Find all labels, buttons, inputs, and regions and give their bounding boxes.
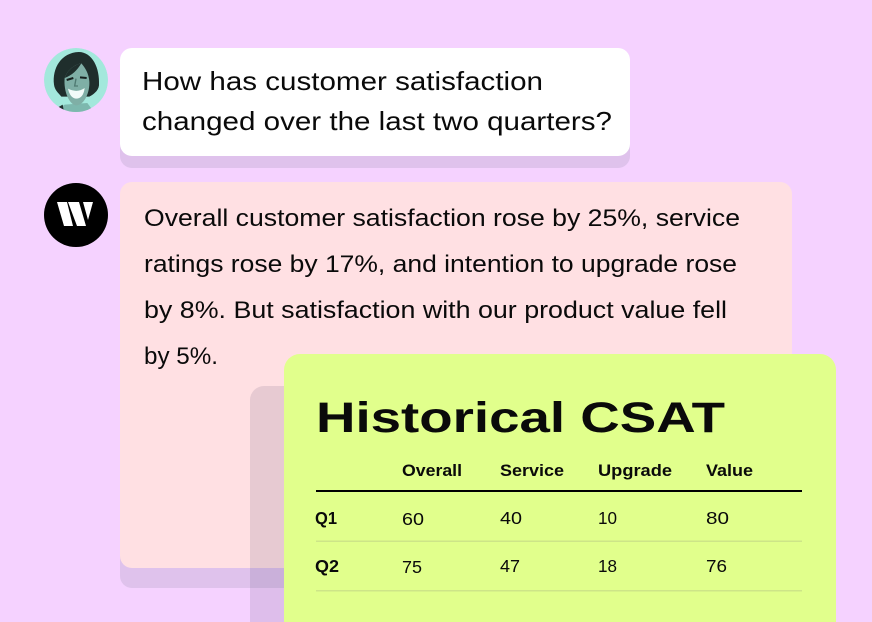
assistant logo [44, 183, 108, 247]
question text: changed over the last two quarters? [142, 106, 612, 136]
row Q2: Q2 [315, 556, 339, 576]
table header: Overall [402, 461, 462, 480]
row Q2: 47 [500, 556, 520, 576]
row Q1: Q1 [315, 508, 337, 528]
row Q1 [315, 508, 729, 529]
card title: Historical CSAT [316, 394, 725, 442]
question bubble [120, 48, 630, 168]
row Q2: 75 [402, 557, 422, 577]
row Q2 [315, 556, 727, 577]
table header [402, 461, 753, 480]
question text [142, 66, 612, 136]
answer text: by 5%. [144, 343, 218, 370]
row Q1: 10 [598, 508, 617, 528]
answer text: by 8%. But satisfaction with our product value fell [144, 297, 727, 324]
row Q1: 80 [706, 508, 729, 528]
row Q2: 18 [598, 556, 617, 576]
answer text: ratings rose by 17%, and intention to upgrade rose [144, 251, 737, 278]
row Q1: 40 [500, 508, 522, 528]
answer bubble [120, 182, 792, 588]
answer text [144, 205, 740, 370]
row Q2: 76 [706, 556, 727, 576]
table header: Service [500, 461, 564, 480]
answer text: Overall customer satisfaction rose by 25%, service [144, 205, 740, 232]
table card shadow [250, 386, 290, 622]
table header: Value [706, 461, 753, 480]
question text: How has customer satisfaction [142, 66, 543, 96]
row Q1: 60 [402, 509, 424, 529]
table card [284, 354, 836, 622]
table header: Upgrade [598, 461, 672, 480]
user avatar [44, 48, 108, 112]
